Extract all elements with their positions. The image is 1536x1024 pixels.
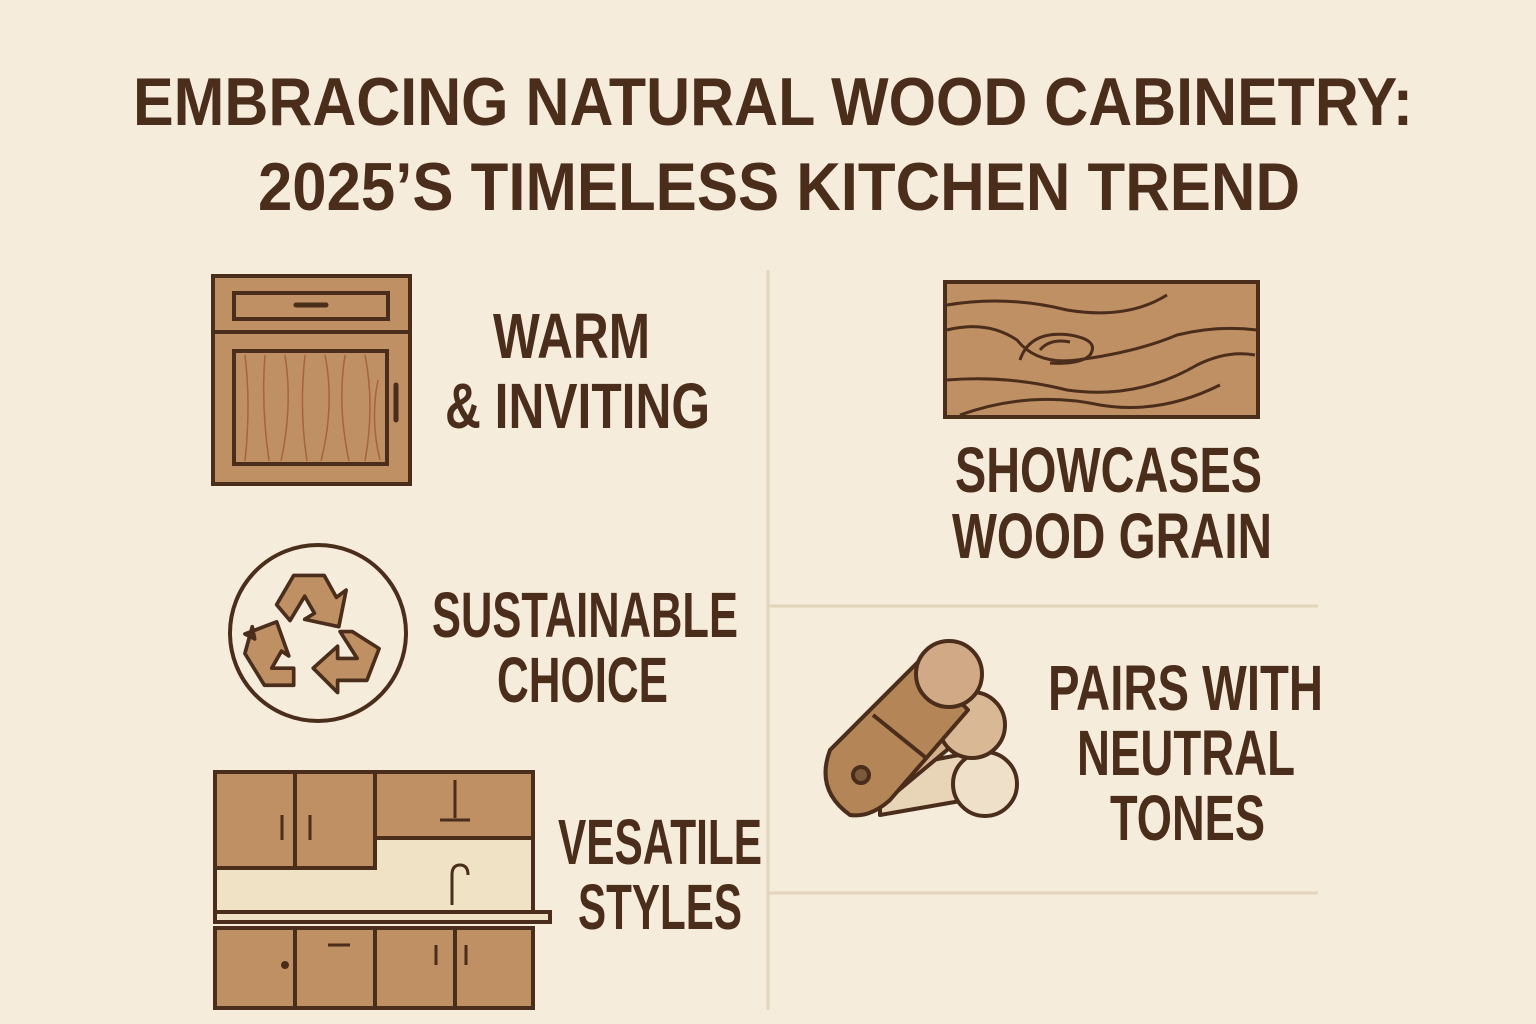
text: sustainable choice xyxy=(432,579,738,716)
text: pairs with neutral tones: TONES xyxy=(1110,782,1265,854)
text: sustainable choice: SUSTAINABLE xyxy=(432,579,738,651)
icon: wood plank xyxy=(945,282,1258,417)
title xyxy=(133,64,1413,225)
text: showcases wood grain xyxy=(952,434,1272,572)
text: pairs with neutral tones xyxy=(1048,652,1323,854)
text: versatile styles: VESATILE xyxy=(558,806,762,878)
text: warm & inviting xyxy=(445,300,710,442)
icon: kitchen xyxy=(215,772,550,1008)
text: pairs with neutral tones: PAIRS WITH xyxy=(1048,652,1323,724)
icon: recycle xyxy=(230,545,406,721)
text: showcases wood grain: WOOD GRAIN xyxy=(952,500,1272,572)
text: warm & inviting: WARM xyxy=(493,300,650,372)
text: pairs with neutral tones: NEUTRAL xyxy=(1077,717,1295,789)
text: sustainable choice: CHOICE xyxy=(497,644,668,716)
icon: cabinet xyxy=(213,276,410,484)
text: versatile styles xyxy=(558,806,762,943)
icon: swatches xyxy=(826,641,1017,816)
text: versatile styles: STYLES xyxy=(578,871,742,943)
title: EMBRACING NATURAL WOOD CABINETRY: xyxy=(133,64,1413,140)
text: showcases wood grain: SHOWCASES xyxy=(955,434,1262,506)
text: warm & inviting: & INVITING xyxy=(445,370,710,442)
title: 2025’S TIMELESS KITCHEN TREND xyxy=(258,149,1300,225)
